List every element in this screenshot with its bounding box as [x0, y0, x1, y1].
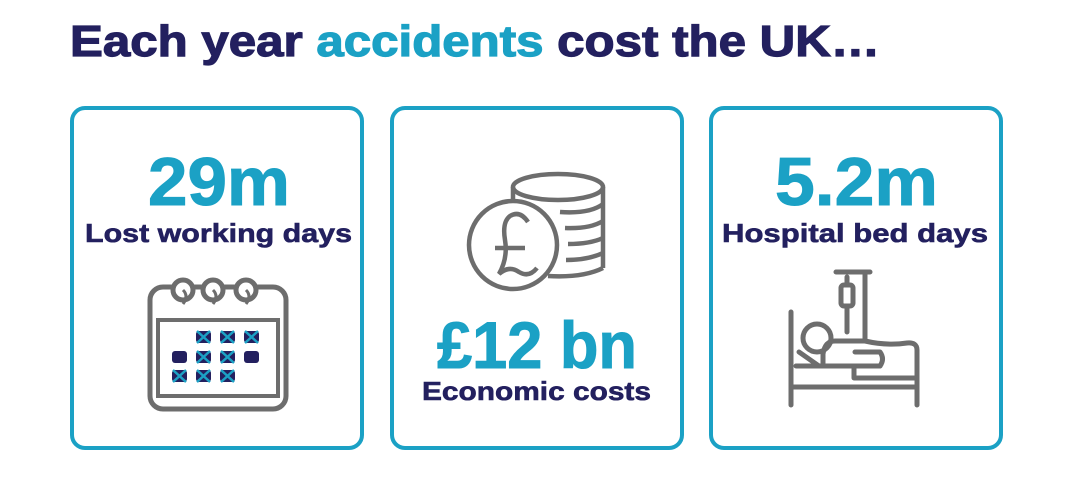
icon: hospital bed — [791, 272, 917, 405]
panel: lost working days — [72, 108, 362, 448]
title: Each year accidents cost the UK… — [70, 17, 880, 66]
icon: coins — [469, 174, 603, 289]
label: economic costs: Economic costs — [422, 376, 651, 406]
panel: economic costs — [392, 108, 682, 448]
label: lost working days: Lost working days — [85, 218, 352, 248]
label: hospital bed days: Hospital bed days — [722, 218, 988, 248]
stat: 5.2m: 5.2m — [775, 144, 938, 220]
stat: 29m: 29m — [148, 144, 290, 220]
stat: £12 bn: £12 bn — [437, 308, 637, 382]
panel: hospital bed days — [711, 108, 1001, 448]
icon: calendar — [150, 280, 286, 409]
